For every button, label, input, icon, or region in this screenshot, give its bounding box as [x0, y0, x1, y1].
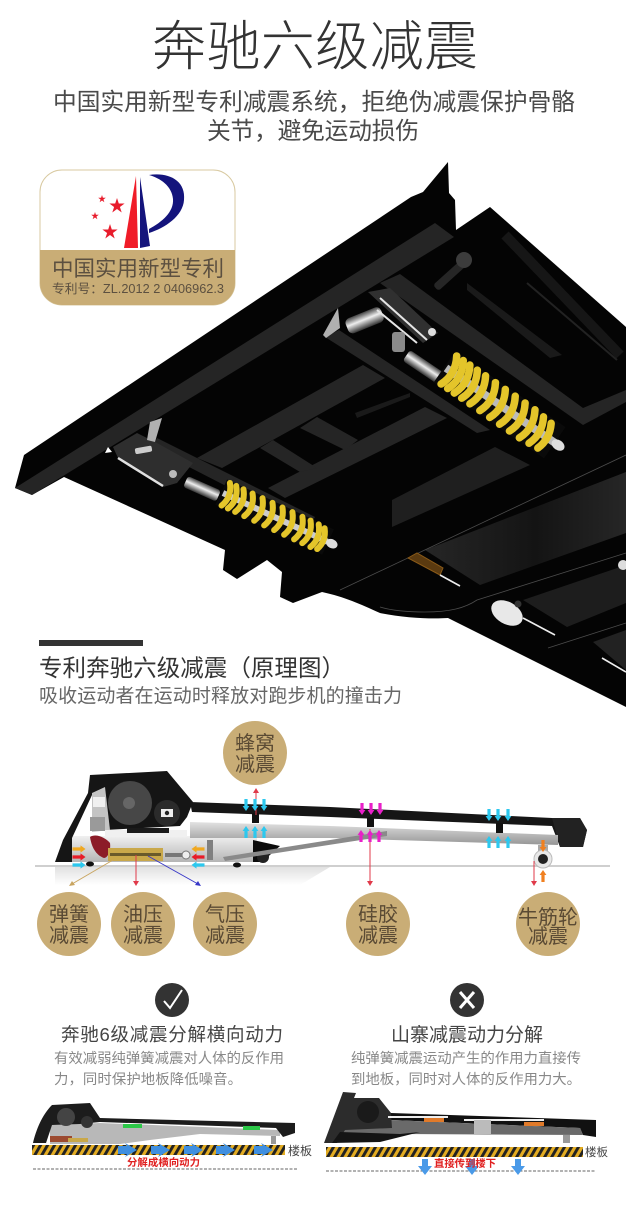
callout: spring: 减震 — [49, 924, 89, 947]
running deck — [190, 802, 587, 847]
base housing — [72, 836, 257, 862]
patent name text: 中国实用新型专利 — [52, 257, 224, 281]
right comparison description: 到地板，同时对人体的反作用力大。 — [351, 1071, 581, 1088]
dark interior panels — [467, 283, 562, 358]
lower shock mechanism — [105, 418, 221, 502]
patent badge — [40, 170, 235, 305]
callout: silicone: 减震 — [358, 924, 398, 947]
callout: spring: 弹簧 — [49, 903, 89, 926]
callout: pneumatic — [193, 892, 257, 956]
magenta shock arrows, silicone — [358, 803, 383, 842]
patent number text: 专利号：ZL.2012 2 0406962.3 — [52, 281, 224, 296]
orange wheel arrows — [540, 840, 546, 882]
treadmill principle diagram — [35, 771, 610, 886]
section heading: 专利奔驰六级减震（原理图） — [39, 655, 345, 681]
callout: honeycomb: 减震 — [235, 753, 275, 776]
right comparison heading: 山寨减震动力分解 — [391, 1024, 543, 1046]
callout: pneumatic: 减震 — [205, 924, 245, 947]
cyan shock arrows, honeycomb — [243, 799, 267, 838]
orange vent and white strips — [408, 553, 443, 575]
callout: tendon wheel: 减震 — [528, 925, 568, 948]
right force arrows — [418, 1159, 525, 1175]
leader lines — [72, 791, 534, 884]
left hazard floor strip — [32, 1145, 285, 1155]
grey frame bands — [15, 223, 626, 528]
callout: hydraulic — [111, 892, 175, 956]
cyan shock arrows, rear — [486, 809, 511, 848]
upper shock mechanism — [323, 252, 472, 385]
title: 奔驰六级减震 — [152, 17, 478, 77]
left comparison description: 有效减弱纯弹簧减震对人体的反作用 — [54, 1050, 284, 1067]
left force arrows — [118, 1143, 273, 1157]
wheel — [534, 845, 552, 868]
subtitle text block: 关节，避免运动损伤 — [207, 118, 419, 145]
callout: hydraulic: 减震 — [123, 924, 163, 947]
left small treadmill — [33, 1103, 295, 1144]
aluminium rail — [190, 822, 558, 845]
callout: tendon wheel: 牛筋轮 — [518, 906, 578, 929]
leader arrowheads — [69, 788, 537, 886]
right small treadmill — [324, 1092, 596, 1143]
floor line — [35, 865, 610, 867]
left comparison heading: 奔驰6级减震分解横向动力 — [61, 1024, 283, 1045]
left comparison description: 力，同时保护地板降低噪音。 — [54, 1071, 242, 1088]
section description: 吸收运动者在运动时释放对跑步机的撞击力 — [39, 685, 402, 707]
support bar — [223, 831, 387, 861]
callout: honeycomb: 蜂窝 — [235, 732, 275, 755]
feet — [86, 862, 241, 868]
silicone posts — [252, 813, 503, 833]
left comparison description — [54, 1050, 284, 1088]
callout: honeycomb — [223, 721, 287, 785]
icon: check mark — [155, 983, 189, 1017]
black frame silhouette — [15, 162, 626, 707]
subtitle text block — [53, 89, 575, 145]
motor interior — [92, 787, 110, 832]
callout: spring — [37, 892, 101, 956]
upper yellow spring — [434, 351, 575, 465]
right hazard floor strip — [326, 1147, 583, 1157]
treadmill underside frame illustration — [15, 162, 626, 707]
right floor label: 楼板 — [585, 1145, 608, 1159]
left floor label: 楼板 — [288, 1143, 312, 1158]
section divider bar — [39, 640, 143, 646]
left dashed line — [33, 1168, 298, 1170]
icon: roller wheel — [487, 595, 527, 631]
right dashed line — [326, 1170, 595, 1172]
floor reflection — [55, 867, 330, 885]
right comparison description — [351, 1050, 581, 1088]
icon: cross mark — [450, 983, 484, 1017]
side arrows — [72, 845, 204, 869]
callout: silicone — [346, 892, 410, 956]
callout: pneumatic: 气压 — [205, 903, 245, 926]
callout: tendon wheel — [516, 892, 580, 956]
right comparison description: 纯弹簧减震运动产生的作用力直接传 — [351, 1050, 581, 1067]
callout: hydraulic: 油压 — [123, 903, 163, 926]
thin edge highlights — [340, 455, 626, 648]
icon: patent P logo — [91, 174, 184, 248]
lower yellow spring — [215, 479, 343, 559]
left force caption: 分解成横向动力 — [127, 1156, 200, 1169]
subtitle text block: 中国实用新型专利减震系统，拒绝伪减震保护骨骼 — [53, 89, 575, 116]
motor hood — [55, 771, 193, 862]
callout: silicone: 硅胶 — [358, 903, 398, 926]
cam and spring assembly — [90, 836, 110, 858]
right force caption: 直接传到楼下 — [434, 1157, 496, 1170]
